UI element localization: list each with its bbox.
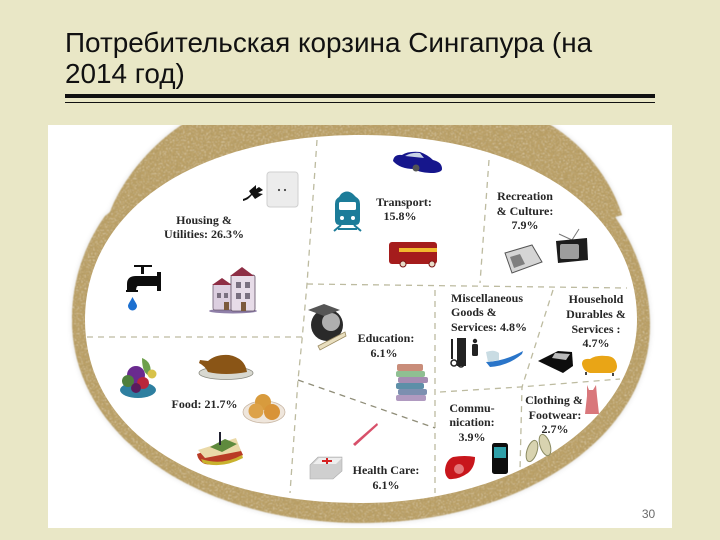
icon: sandwich — [197, 432, 243, 465]
icon: houses — [209, 267, 257, 314]
icon: toothbrush — [486, 351, 523, 367]
icon: sofa — [582, 356, 617, 376]
icon: plate of buns — [243, 394, 285, 423]
clothing label: Footwear: — [529, 408, 581, 422]
communication label: Commu- — [449, 401, 495, 415]
white picture panel — [48, 125, 672, 528]
miscellaneous label: Services: 4.8% — [451, 320, 527, 334]
icon: fruit basket — [120, 358, 156, 398]
recreation label: 7.9% — [512, 218, 538, 232]
education label — [358, 331, 414, 360]
page number: 30 — [642, 507, 655, 521]
clothing label: 2.7% — [542, 422, 568, 436]
food label: Food: 21.7% — [172, 397, 238, 411]
icon: train — [334, 192, 361, 231]
icon: red telephone — [445, 456, 475, 479]
icon: car — [393, 152, 442, 173]
health care label: Health Care: — [353, 463, 419, 477]
communication label — [449, 401, 495, 444]
housing label — [164, 213, 244, 241]
housing label: Housing & — [176, 213, 232, 227]
communication label: 3.9% — [458, 430, 486, 444]
icon: graduation globe — [308, 304, 346, 350]
miscellaneous label — [451, 291, 527, 334]
health care label: 6.1% — [372, 478, 400, 492]
clothing label — [525, 393, 583, 436]
icon: plug — [243, 185, 263, 201]
recreation label: & Culture: — [497, 204, 553, 218]
health care label — [353, 463, 419, 492]
transport label: Transport: — [376, 195, 432, 209]
icon: bed — [538, 351, 573, 373]
icon: bus — [389, 242, 437, 267]
transport label: 15.8% — [384, 209, 416, 223]
miscellaneous label: Miscellaneous — [451, 291, 523, 305]
icon: newspaper — [505, 245, 542, 273]
basket infographic — [48, 125, 672, 528]
communication label: nication: — [449, 415, 495, 429]
clothing label: Clothing & — [525, 393, 583, 407]
household label — [566, 292, 626, 350]
icon: first-aid kit — [310, 457, 342, 479]
icon: dress — [585, 385, 599, 414]
household label: Durables & — [566, 307, 626, 321]
icon: mobile phone — [492, 443, 508, 474]
title — [65, 27, 592, 89]
miscellaneous label: Goods & — [451, 305, 497, 319]
household label: Household — [569, 292, 624, 306]
education label: Education: — [358, 331, 414, 345]
education label: 6.1% — [370, 346, 398, 360]
title: Потребительская корзина Сингапура (на — [65, 27, 592, 58]
title: 2014 год) — [65, 58, 185, 89]
icon: syringe — [353, 423, 378, 446]
basket rim — [72, 115, 650, 523]
icon: television — [556, 229, 588, 263]
icon: wall socket — [267, 172, 298, 207]
icon: comb, scissors and person — [451, 338, 478, 367]
title rule — [65, 94, 655, 103]
icon: tap and water drop — [126, 265, 161, 310]
icon: flip-flops — [524, 433, 553, 463]
household label: Services : — [572, 322, 620, 336]
housing label: Utilities: 26.3% — [164, 227, 244, 241]
household label: 4.7% — [582, 336, 610, 350]
recreation label: Recreation — [497, 189, 553, 203]
recreation label — [497, 189, 553, 232]
icon: roast turkey — [199, 355, 253, 380]
section dividers — [87, 140, 627, 493]
icon: stack of books — [396, 364, 428, 401]
transport label — [376, 195, 432, 223]
